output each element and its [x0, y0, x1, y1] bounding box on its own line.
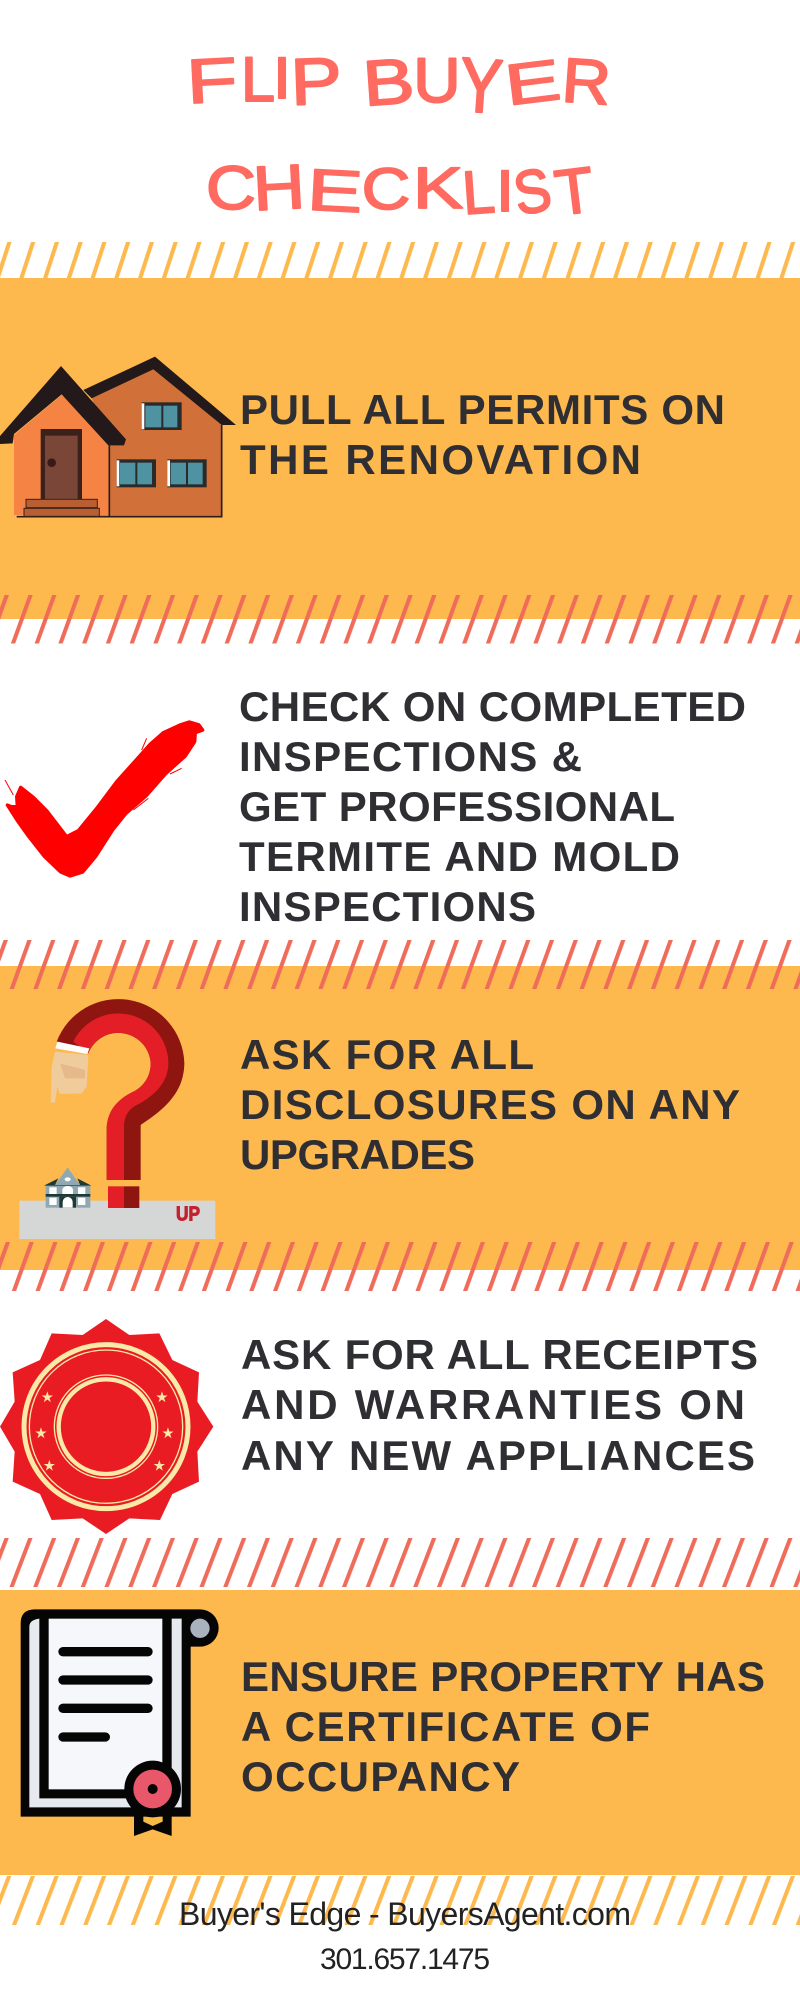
footer contact — [179, 1896, 631, 1976]
title: S — [509, 156, 556, 229]
panel: inspections — [5, 683, 746, 930]
icon: red check mark — [5, 722, 203, 876]
icon: red badge: ★ — [161, 1425, 175, 1442]
title: H — [251, 152, 307, 224]
icon: question mark with hand — [19, 999, 215, 1239]
text: certificate: A CERTIFICATE OF — [241, 1703, 650, 1750]
icon: house — [0, 357, 236, 517]
text: pull permits: THE RENOVATION — [240, 436, 641, 483]
icon: red badge: ★ — [153, 1457, 166, 1474]
title: E — [306, 157, 364, 226]
title: P — [289, 44, 343, 120]
text: inspections: GET PROFESSIONAL — [239, 783, 675, 830]
title: R — [560, 45, 613, 118]
panel: disclosures — [0, 966, 800, 1270]
title: L — [460, 157, 497, 227]
text: receipts — [241, 1331, 758, 1479]
footer contact: Buyer's Edge - BuyersAgent.com — [179, 1896, 631, 1932]
icon: red badge: ★ — [41, 1389, 54, 1406]
title: I — [496, 158, 514, 224]
title: F — [185, 44, 239, 117]
title: B — [360, 44, 417, 119]
text: disclosures: DISCLOSURES ON ANY — [240, 1081, 740, 1128]
footer contact: 301.657.1475 — [320, 1943, 490, 1976]
title: U — [413, 45, 461, 116]
title: C — [362, 157, 410, 222]
title: T — [551, 155, 598, 229]
text: certificate: ENSURE PROPERTY HAS — [241, 1653, 765, 1700]
title: L — [241, 45, 275, 115]
icon: certificate — [21, 1609, 219, 1836]
text: inspections — [239, 683, 746, 930]
text: inspections: INSPECTIONS — [239, 883, 536, 930]
title: I — [273, 45, 291, 111]
panel: certificate of occupancy — [0, 1590, 800, 1875]
text: pull permits — [240, 386, 725, 483]
text: disclosures: UPGRADES — [240, 1131, 475, 1178]
title: C — [206, 154, 256, 222]
panel: receipts — [0, 1319, 758, 1534]
panel: pull permits — [0, 278, 800, 619]
text: inspections: INSPECTIONS & — [239, 733, 582, 780]
text: disclosures: ASK FOR ALL — [240, 1031, 534, 1078]
icon: red badge: ★ — [155, 1389, 169, 1406]
icon: red badge: ★ — [43, 1457, 56, 1474]
icon: red badge — [0, 1319, 213, 1534]
title: K — [413, 156, 463, 221]
text: receipts: ASK FOR ALL RECEIPTS — [241, 1331, 758, 1378]
text: pull permits: PULL ALL PERMITS ON — [240, 386, 725, 433]
title: E — [501, 47, 564, 118]
text: certificate: OCCUPANCY — [241, 1753, 520, 1800]
text: receipts: ANY NEW APPLIANCES — [241, 1432, 755, 1479]
text: disclosures — [240, 1031, 740, 1178]
text: inspections: CHECK ON COMPLETED — [239, 683, 746, 730]
icon: red badge: ★ — [34, 1425, 48, 1442]
title: Y — [457, 41, 505, 130]
icon: question mark with hand: UP — [176, 1203, 200, 1226]
text: inspections: TERMITE AND MOLD — [239, 833, 680, 880]
text: certificate — [241, 1653, 765, 1800]
text: receipts: AND WARRANTIES ON — [241, 1381, 745, 1428]
title — [185, 41, 613, 229]
